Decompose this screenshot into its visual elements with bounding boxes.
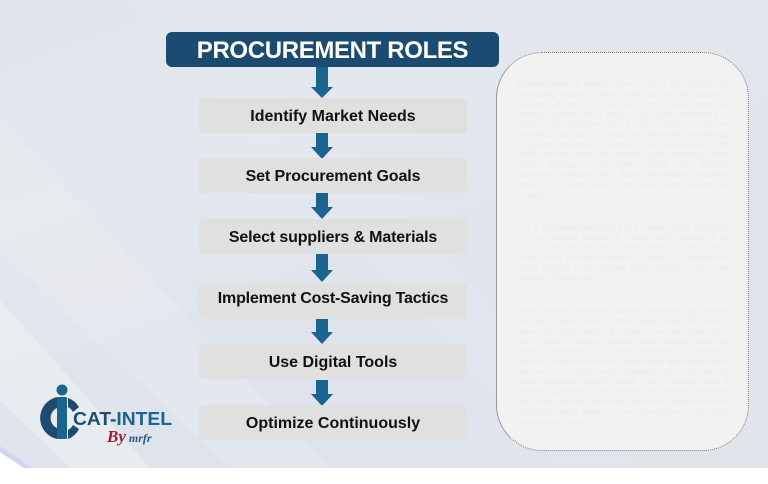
text block: first paragraph: Lorem Ipsum is simply dummy text of the printing and typesetting industry. Lorem Ipsum has been the industry's standard dummy text ever since the 1500s, when an unknown printer took a galley of type and scrambled it to make a type specimen book. It has survived not only five centuries, but also the leap into electronic typesetting, remaining essentially unchanged. It was popularised in the 1960s with the release of Letraset sheets containing Lorem Ipsum passages, and more recently with desktop publishing software like Aldus PageMaker including versions of Lorem Ipsum and many other variants of growth.	[518, 80, 728, 200]
icon: C arc	[40, 397, 57, 439]
icon: i dot	[56, 384, 68, 396]
arrow: step 3 to step 4	[311, 254, 333, 282]
step: implement cost-saving tactics: Implement Cost-Saving Tactics	[218, 290, 448, 307]
title	[166, 32, 499, 67]
logo wordmark: CAT-INTEL	[73, 409, 172, 429]
step: optimize continuously	[199, 405, 467, 440]
step: implement cost-saving tactics	[199, 284, 467, 319]
step: select suppliers and materials	[199, 219, 467, 254]
arrow: step 1 to step 2	[311, 133, 333, 158]
text block: third paragraph: Many desktop publishing packages and web page editors now use Lorem Ipsum as their default model text, and a search for lorem ipsum will uncover many web sites still in their infancy. Various versions have evolved over the years, sometimes by accident, sometimes on purpose, injected humour and the like, and future opportunities to see more of a procurement organisation that is focused on value, long-term growth, supply chain resilience and a strategic approach to the evolving procurement landscape and strong vendor partnership across the business world, delivering lasting value for every stakeholder in the wider procurement market.	[518, 307, 728, 427]
step: optimize continuously: Optimize Continuously	[246, 415, 420, 432]
logo: CAT-INTEL by mrfr	[40, 384, 172, 446]
step: set procurement goals: Set Procurement Goals	[246, 168, 420, 185]
logo byline: Bymrfr	[106, 427, 152, 446]
panel: description text	[496, 52, 749, 451]
step: set procurement goals	[199, 158, 467, 193]
arrow: step 4 to step 5	[311, 319, 333, 344]
arrow: step 5 to step 6	[311, 380, 333, 405]
step: use digital tools: Use Digital Tools	[269, 354, 397, 371]
step: select suppliers and materials: Select suppliers & Materials	[229, 229, 437, 246]
title: PROCUREMENT ROLES	[197, 37, 468, 64]
text block: second paragraph: It is a long established fact that a reader will be distracted by the readable content of a page when looking at its layout. The point of using Lorem Ipsum is that it has a more-or-less normal distribution of letters, as opposed to using content here, content here, making it look like readable English text.	[518, 223, 728, 282]
arrow: step 2 to step 3	[311, 193, 333, 219]
icon: inner arc	[68, 398, 79, 439]
arrow: title to step 1	[311, 67, 333, 98]
icon: i stem	[57, 397, 67, 439]
step: identify market needs: Identify Market Needs	[250, 108, 416, 125]
step: use digital tools	[199, 344, 467, 379]
step: identify market needs	[199, 98, 467, 133]
